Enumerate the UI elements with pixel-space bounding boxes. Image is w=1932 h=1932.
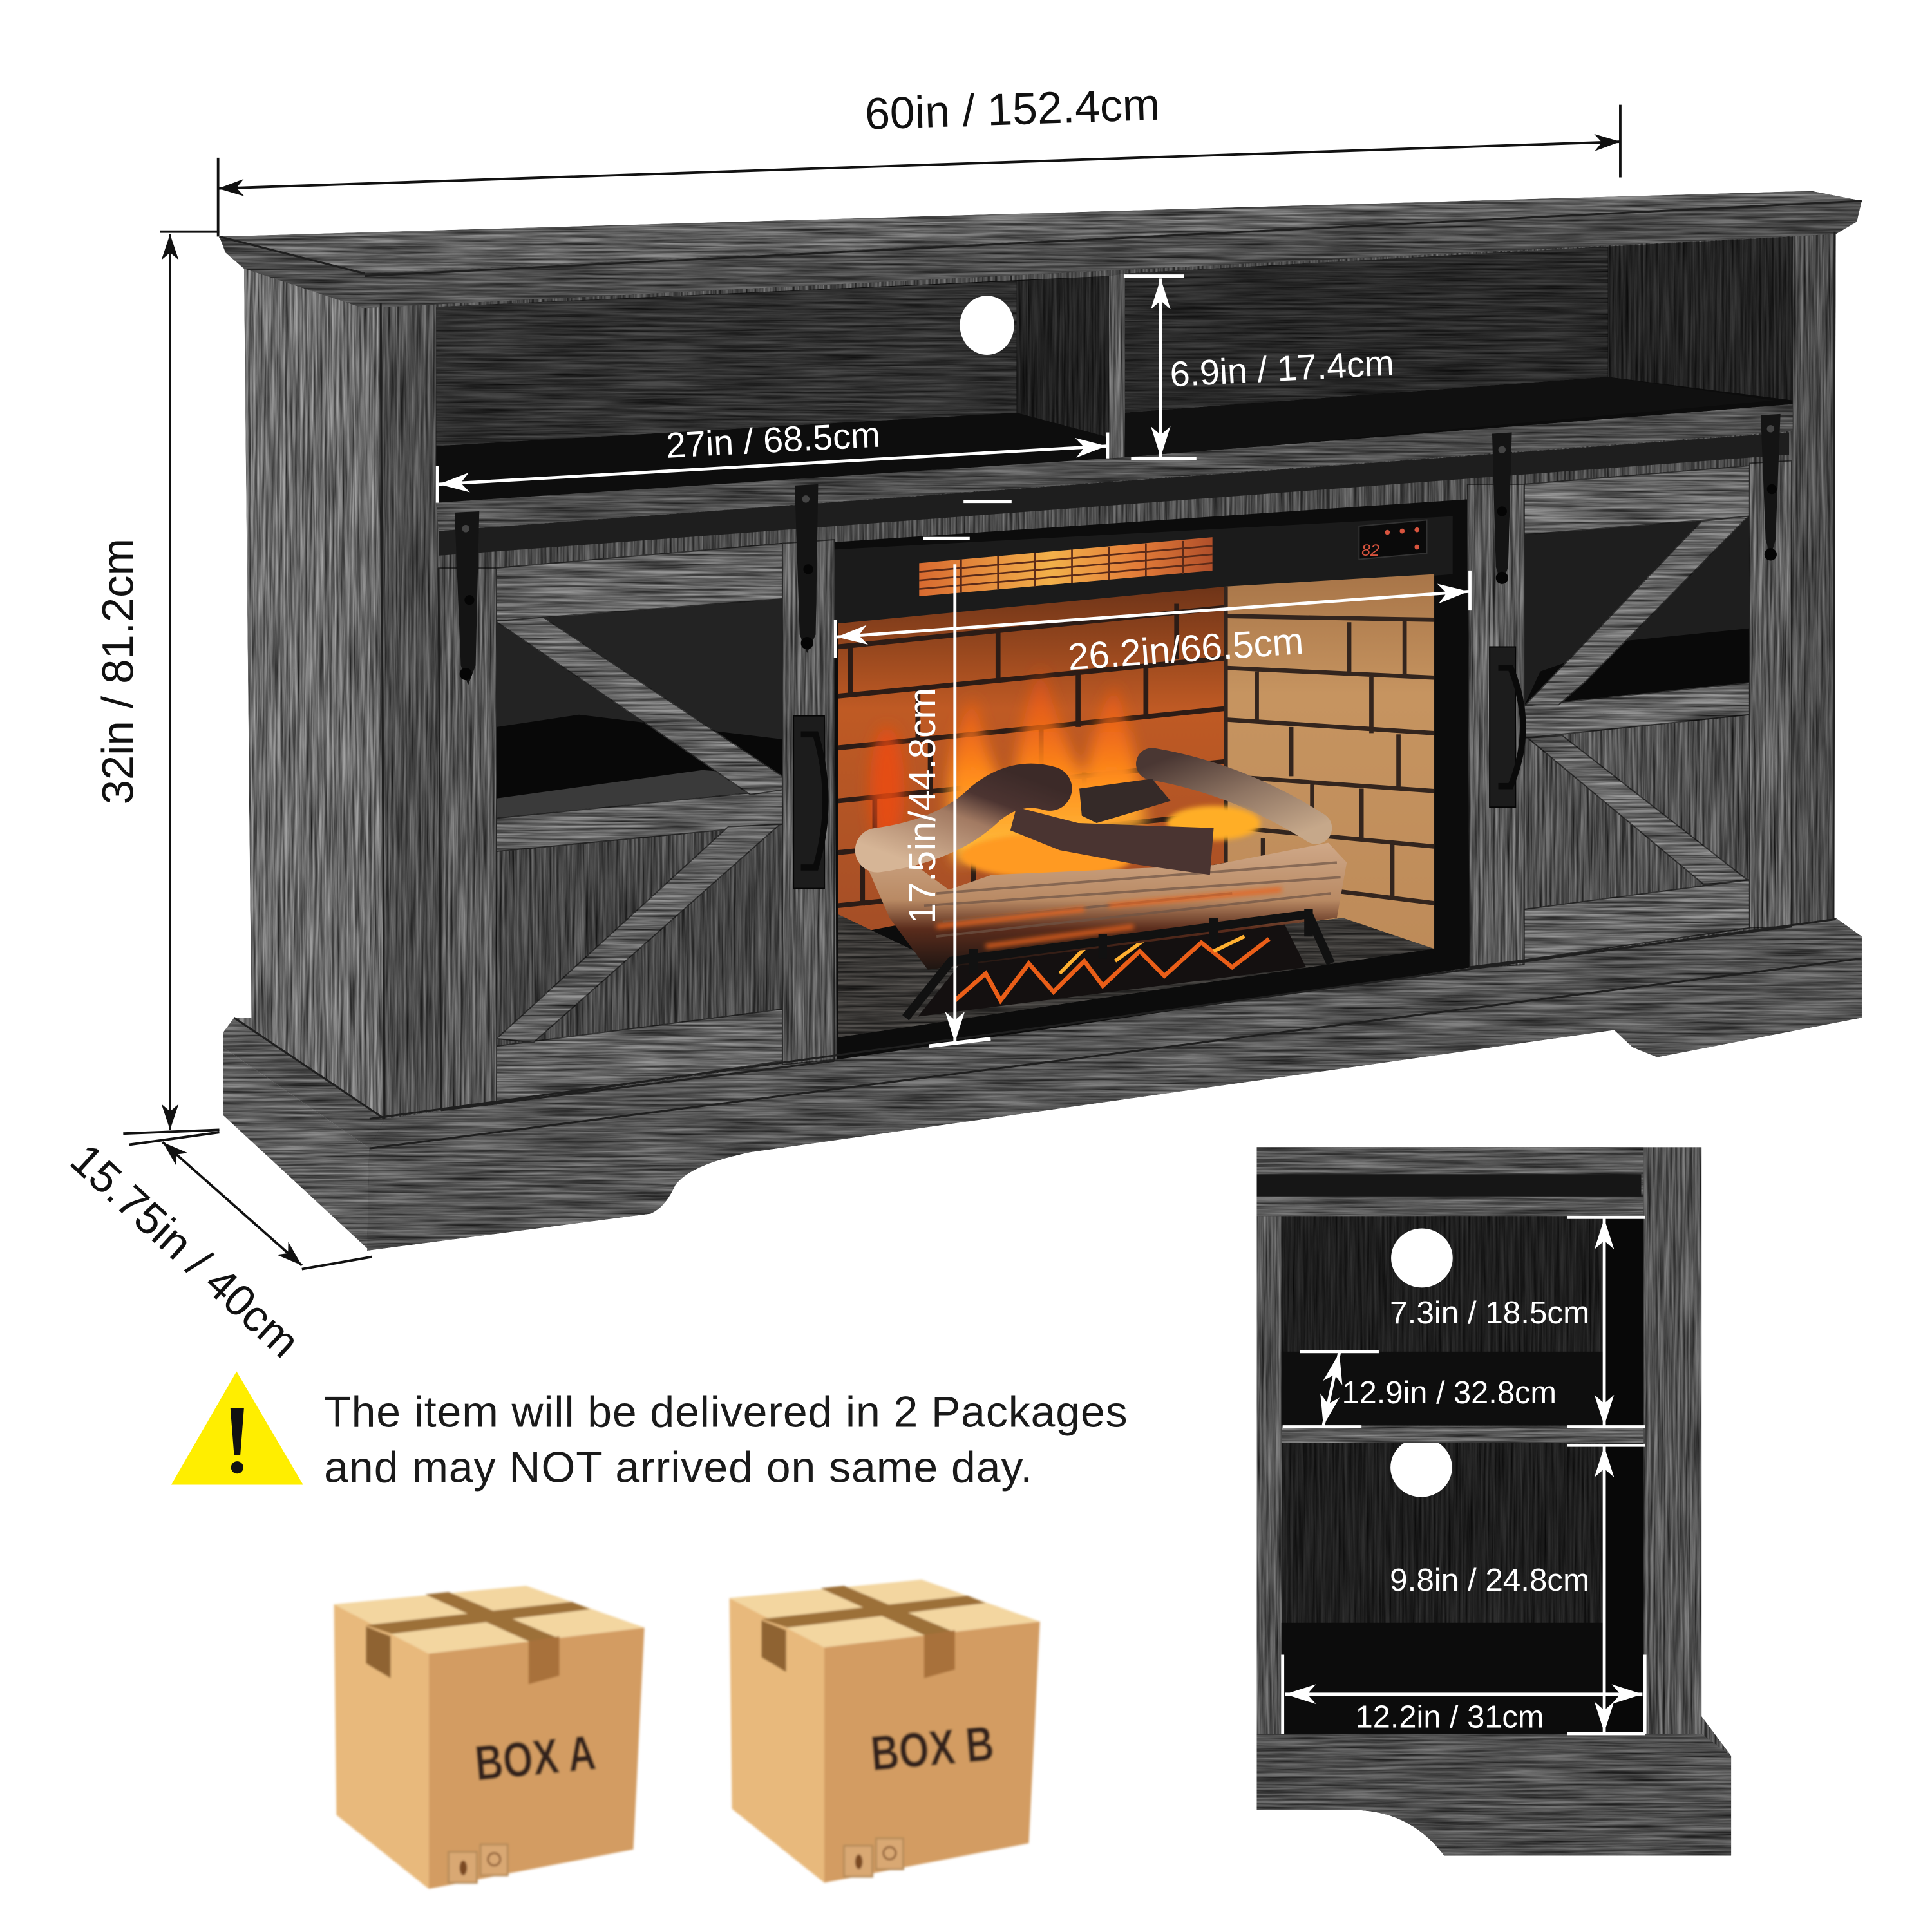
left sliding door xyxy=(439,540,834,1110)
cabinet seams xyxy=(220,201,1862,1148)
ember bed xyxy=(918,918,1306,1016)
right shelf back wall xyxy=(1125,247,1608,413)
barn door hangers xyxy=(455,414,1781,685)
dimension: firebox width: 26.2in/66.5cm xyxy=(1066,620,1305,678)
box B: BOX B xyxy=(869,1716,996,1781)
delivery notice text xyxy=(324,1388,1128,1492)
flames xyxy=(870,665,1146,862)
shelf front lip xyxy=(436,404,1793,531)
right shelf floor front xyxy=(1125,377,1774,459)
firebox floor xyxy=(838,914,1434,1037)
inset dimension: upper height: 7.3in / 18.5cm xyxy=(1390,1295,1589,1331)
delivery notice text: and may NOT arrived on same day. xyxy=(324,1444,1032,1492)
glow beneath logs xyxy=(961,834,1133,878)
firebox back wall bricks xyxy=(838,587,1226,936)
bark streaks on front log xyxy=(924,862,1341,936)
overall dimension: height: 32in / 81.2cm xyxy=(93,538,143,804)
hanger 2 xyxy=(795,484,818,653)
door stiles xyxy=(439,540,834,1110)
delivery notice text: The item will be delivered in 2 Packages xyxy=(324,1388,1128,1437)
dimension: shelf width: 27in / 68.5cm xyxy=(665,415,881,466)
dimension: firebox height: 17.5in/44.8cm xyxy=(902,688,943,924)
frame rails and braces xyxy=(1524,466,1750,960)
firebox side wall bricks xyxy=(1226,574,1434,973)
upper cable hole xyxy=(1391,1229,1453,1287)
sliding door track rail xyxy=(439,433,1789,556)
ember streaks on front log xyxy=(936,889,1282,946)
overall dimension: width xyxy=(218,79,1620,236)
log glow right xyxy=(1167,806,1260,840)
inner shelf board xyxy=(497,770,782,818)
base plinth left side xyxy=(223,1047,370,1251)
right handle xyxy=(1490,647,1523,807)
shelf divider xyxy=(1109,274,1125,459)
log grate xyxy=(905,909,1331,1018)
inset upper compartment xyxy=(1282,1216,1643,1426)
short dark log xyxy=(1079,779,1171,823)
inner shelf xyxy=(1524,629,1750,706)
control display xyxy=(1359,520,1427,560)
box A xyxy=(334,1586,645,1889)
door handles xyxy=(793,647,1523,888)
cable hole xyxy=(960,296,1014,355)
hanger 3 xyxy=(1492,433,1512,585)
dimension: firebox height xyxy=(902,538,990,1046)
control display: 82 xyxy=(1361,542,1379,560)
main front log xyxy=(859,843,1347,970)
inset dimension: inner height xyxy=(1283,1352,1557,1427)
cabinet left side panel xyxy=(234,265,384,1128)
inset dimension: lower height: 9.8in / 24.8cm xyxy=(1390,1562,1589,1598)
base moulding left xyxy=(223,1018,384,1148)
icon: warning triangle xyxy=(171,1371,303,1484)
heater grill xyxy=(919,537,1213,596)
left shelf opening xyxy=(436,276,1109,503)
curved left log xyxy=(877,786,1050,850)
logs xyxy=(859,764,1347,1018)
back right log xyxy=(1152,764,1316,828)
dimension: shelf height: 6.9in / 17.4cm xyxy=(1169,343,1395,394)
inset top rail xyxy=(1257,1147,1643,1216)
lower cable hole xyxy=(1390,1438,1452,1497)
inset cabinet wood body xyxy=(1257,1147,1731,1855)
TV stand with fireplace xyxy=(220,191,1862,1251)
inset track slot xyxy=(1257,1174,1641,1197)
box B xyxy=(730,1580,1040,1882)
top moulding xyxy=(220,201,1862,308)
right shelf side wall xyxy=(1608,236,1793,401)
cabinet front face xyxy=(378,229,1836,1119)
door stiles xyxy=(1468,461,1792,967)
dimension: shelf width xyxy=(437,415,1108,503)
right sliding door xyxy=(1468,461,1792,967)
window opening xyxy=(1524,516,1750,706)
fireplace insert xyxy=(834,499,1472,1059)
inset dimension: depth: 12.2in / 31cm xyxy=(1356,1700,1544,1734)
window opening xyxy=(497,599,782,818)
fireplace frame xyxy=(834,499,1472,1059)
left shelf back wall xyxy=(436,281,1016,446)
left handle xyxy=(793,716,826,888)
dark centre log xyxy=(1010,807,1214,875)
hanger 1 xyxy=(455,511,479,685)
panel: shelf detail inset xyxy=(1257,1147,1731,1855)
overall dimension: height xyxy=(93,232,220,1133)
inset lower compartment xyxy=(1282,1438,1643,1734)
overall dimension: width: 60in / 152.4cm xyxy=(864,79,1160,139)
right shelf opening xyxy=(1125,236,1793,459)
lower planks xyxy=(497,824,782,1046)
hanger 4 xyxy=(1761,414,1781,561)
left shelf side wall xyxy=(1016,276,1109,437)
heater header panel xyxy=(834,516,1453,623)
dimension: firebox width xyxy=(835,502,1470,678)
inner shelf xyxy=(497,715,782,818)
inset dimension: inner height: 12.9in / 32.8cm xyxy=(1342,1376,1557,1410)
base plinth front xyxy=(367,918,1862,1251)
lower planks xyxy=(1524,715,1750,909)
box A: BOX A xyxy=(473,1725,598,1792)
frame rails and braces xyxy=(495,544,782,1104)
top board xyxy=(220,191,1862,276)
inset base xyxy=(1257,1734,1731,1855)
inset shelf board xyxy=(1282,1426,1643,1443)
overall dimension: depth: 15.75in / 40cm xyxy=(61,1134,309,1367)
